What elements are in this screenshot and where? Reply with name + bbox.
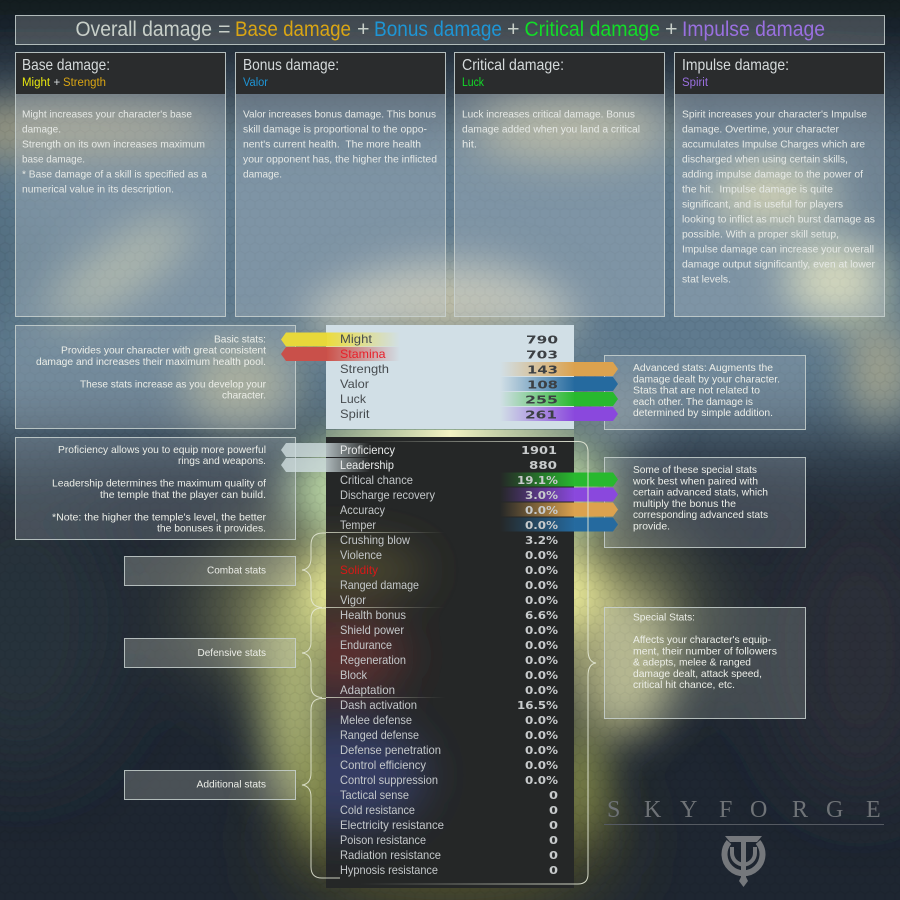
stats table: secondary: Radiation resistance [340, 848, 441, 862]
title bar: + [357, 17, 370, 41]
stats table: secondary: Discharge recovery [340, 488, 435, 502]
stats table: secondary: 0 [549, 835, 558, 847]
panel: critical damage [454, 52, 664, 316]
stats table: secondary: 0.0% [525, 730, 559, 742]
callout: paired special stats: provide. [633, 521, 670, 532]
callout: basic stats: Provides your character with great consistent [61, 346, 266, 357]
panel: impulse damage: damage output significantly, even at lower [682, 258, 875, 270]
label: combat stats: Combat stats [207, 566, 266, 576]
callout: special stats [604, 608, 806, 718]
stats table: primary: Valor [340, 377, 369, 391]
callout: paired special stats: corresponding advanced stats [633, 510, 768, 521]
panel: bonus damage: skill damage is proportional to the oppo- [243, 124, 427, 136]
stats table: secondary: Melee defense [340, 713, 412, 727]
title bar: Overall damage [76, 17, 212, 41]
title bar: Critical damage [524, 17, 660, 41]
stats table: secondary: Crushing blow [340, 533, 410, 547]
panel: base damage: Strength on its own increases maximum [22, 138, 205, 150]
stats table: secondary: 0.0% [525, 625, 559, 637]
stats table: secondary: 0.0% [525, 670, 559, 682]
panel: base damage: + [54, 77, 60, 89]
panel: bonus damage: your opponent has, the higher the inflicted [243, 154, 437, 166]
panel: impulse damage: the hit. Impulse damage is quite [682, 184, 833, 196]
callout: special stats: damage dealt, attack speed, [633, 669, 762, 680]
brace: defensive stats [302, 608, 326, 698]
callout: proficiency and leadership: Leadership determines the maximum quality of [52, 479, 266, 490]
panel: primary stats table background [326, 325, 574, 429]
stats table: secondary: 0.0% [525, 550, 559, 562]
stats table: secondary: Health bonus [340, 608, 406, 622]
stats table: secondary: Violence [340, 548, 382, 562]
stats table: secondary: Defense penetration [340, 743, 441, 757]
callout: advanced stats: Advanced stats: Augments the [633, 363, 773, 374]
stats table: secondary: 0.0% [525, 520, 559, 532]
stats table: primary: 790 [526, 334, 558, 346]
glow strip between tables [326, 430, 574, 437]
brace: additional stats [302, 698, 340, 878]
divider lines [326, 532, 445, 698]
arrows: basic stats [281, 332, 400, 361]
panel: bonus damage: Bonus damage: [243, 57, 339, 74]
stats table: secondary: 0.0% [525, 655, 559, 667]
panel: impulse damage [674, 52, 884, 316]
stats table: primary: 143 [527, 364, 558, 376]
stats table: primary [340, 332, 558, 422]
logo: Skyforge wordmark: SKYFORGE [607, 797, 881, 823]
stats table: secondary: Accuracy [340, 503, 385, 517]
callout: proficiency and leadership: Proficiency allows you to equip more powerful [58, 445, 266, 456]
stats table: secondary: 19.1% [517, 475, 559, 487]
panel: critical damage: Luck [462, 77, 484, 89]
stats table: secondary: 0.0% [525, 580, 559, 592]
panel: base damage: * Base damage of a skill is specified as a [22, 168, 207, 180]
stats table: secondary: Leadership [340, 458, 394, 472]
label: additional stats: Additional stats [196, 780, 266, 790]
stats table: primary: Spirit [340, 407, 370, 421]
panel: base damage: Might [22, 77, 51, 89]
stats table: secondary: 0.0% [525, 595, 559, 607]
panel: base damage: Strength [63, 77, 106, 89]
panel: secondary stats table background [326, 437, 574, 888]
stats table: secondary: Regeneration [340, 653, 406, 667]
stats table: secondary: Control efficiency [340, 758, 426, 772]
stats table: secondary: Ranged defense [340, 728, 419, 742]
callout: advanced stats: determined by simple addition. [633, 408, 773, 419]
panel: base damage: damage. [22, 124, 61, 136]
panel: bonus damage: damage. [243, 168, 282, 180]
stats table: secondary: 0.0% [525, 640, 559, 652]
stats table: secondary: Cold resistance [340, 803, 415, 817]
stats table: secondary [340, 443, 559, 877]
panel: impulse damage: possible. With a proper skill setup, [682, 228, 839, 240]
brace: combat stats [302, 533, 326, 608]
panel: bonus damage: Valor [243, 77, 268, 89]
stats table: secondary: Proficiency [340, 443, 395, 457]
stats table: primary: 108 [527, 380, 558, 392]
stats table: secondary: 880 [529, 460, 557, 472]
stats table: secondary: 3.0% [525, 490, 559, 502]
stats table: secondary: 16.5% [517, 700, 559, 712]
callout: proficiency and leadership: rings and weapons. [178, 456, 266, 467]
label: defensive stats: Defensive stats [198, 648, 266, 659]
stats table: secondary: Block [340, 668, 368, 682]
stats table: secondary: Endurance [340, 638, 392, 652]
callout: special stats: & adepts, melee & ranged [633, 658, 751, 668]
panel: base damage [16, 52, 226, 316]
stats table: secondary: 0.0% [525, 505, 559, 517]
stats table: secondary: 0 [549, 805, 558, 817]
arrows: proficiency and leadership [281, 443, 372, 472]
stats table: primary: Strength [340, 362, 389, 376]
callout: advanced stats [604, 356, 806, 430]
stats table: primary: Stamina [340, 347, 386, 361]
callout: special stats: ment, their number of followers [633, 646, 777, 657]
panel: bonus damage: nent's current health. The more health [243, 138, 421, 150]
panel: base damage: base damage. [22, 154, 85, 166]
callout: special stats: Special Stats: [633, 612, 695, 624]
callout: paired special stats: Some of these special stats [633, 465, 757, 476]
panel: base damage: Base damage: [22, 57, 110, 74]
stats table: secondary: 0.0% [525, 745, 559, 757]
stats table: secondary: Ranged damage [340, 578, 419, 592]
callout: proficiency and leadership: *Note: the higher the temple's level, the better [52, 512, 267, 524]
callout: basic stats: damage and increases their maximum health pool. [36, 357, 266, 368]
callout: advanced stats: each other. The damage is [633, 397, 753, 408]
label: defensive stats [124, 638, 296, 668]
label: additional stats [124, 770, 296, 800]
stats table: secondary: 3.2% [525, 535, 559, 547]
title bar: Impulse damage [682, 17, 825, 41]
stats table: secondary: Temper [340, 518, 376, 532]
callout: advanced stats: damage dealt by your character. [633, 374, 780, 385]
arrows: paired special stats [500, 472, 618, 532]
callout: special stats: critical hit chance, etc. [633, 680, 735, 691]
panel: impulse damage: significant, and is useful for players [682, 198, 843, 210]
stats table: secondary: 0.0% [525, 565, 559, 577]
panel: base damage: numerical value in its description. [22, 184, 174, 196]
stats table: secondary: 1901 [521, 445, 557, 457]
stats table: primary: Luck [340, 392, 367, 406]
stats table: primary: Might [340, 332, 373, 346]
arrows: advanced stats [500, 362, 618, 421]
stats table: secondary: Critical chance [340, 473, 413, 487]
callout: paired special stats: work best when paired with [632, 476, 758, 487]
panel: impulse damage: Spirit [682, 77, 709, 89]
stats table: primary: 703 [526, 350, 558, 362]
title bar: Bonus damage [374, 17, 502, 41]
callout: paired special stats: certain advanced stats, which [633, 488, 768, 498]
panel: critical damage: Luck increases critical damage. Bonus [462, 108, 635, 120]
panel: impulse damage: Impulse damage can increase your overall [682, 244, 874, 256]
callout: basic stats [16, 326, 296, 428]
callout: special stats: Affects your character's equip- [633, 635, 771, 646]
stats table: secondary: Tactical sense [340, 788, 409, 802]
title bar: Base damage [235, 17, 351, 41]
panel: impulse damage: accumulates Impulse Charges which are [682, 138, 865, 150]
stats table: secondary: 0.0% [525, 775, 559, 787]
brace: special stats [360, 442, 596, 884]
stats table: secondary: Adaptation [340, 683, 395, 697]
callout: advanced stats: Stats that are not related to [633, 386, 760, 396]
stats table: secondary: Shield power [340, 623, 404, 637]
panel: impulse damage: Spirit increases your character's Impulse [682, 108, 867, 120]
stats table: secondary: Vigor [340, 593, 366, 607]
stats table: secondary: Dash activation [340, 698, 417, 712]
panel: critical damage: Critical damage: [462, 57, 564, 74]
stats table: secondary: 0.0% [525, 685, 559, 697]
stats table: secondary: Poison resistance [340, 833, 426, 847]
stats table: secondary: Electricity resistance [340, 818, 444, 832]
stats table: secondary: Control suppression [340, 773, 438, 787]
stats table: secondary: 0 [549, 790, 558, 802]
panel: bonus damage: Valor increases bonus damage. This bonus [243, 108, 436, 120]
panel: base damage: Might increases your character's base [22, 108, 192, 120]
stats table: secondary: 0.0% [525, 760, 559, 772]
panel: impulse damage: Impulse damage: [682, 57, 789, 74]
title bar: + [507, 17, 520, 41]
stats table: secondary: 0 [549, 865, 558, 877]
stats table: primary: 261 [525, 410, 557, 422]
stats table: secondary: Solidity [340, 563, 378, 577]
callout: basic stats: These stats increase as you develop your [80, 380, 267, 390]
stats table: secondary: 0 [549, 820, 558, 832]
stats table: secondary: 0 [549, 850, 558, 862]
callout: basic stats: Basic stats: [214, 334, 266, 346]
panel: impulse damage: adding impulse damage to the power of [682, 168, 863, 180]
panel: impulse damage: stat levels. [682, 274, 731, 286]
title bar [16, 16, 884, 44]
panel: critical damage: damage added when you land a critical [462, 124, 640, 136]
callout: proficiency and leadership: the temple that the player can build. [100, 490, 266, 501]
title bar: + [665, 17, 678, 41]
stats table: secondary: 6.6% [525, 610, 559, 622]
panel: critical damage: hit. [462, 138, 477, 150]
label: combat stats [124, 556, 296, 586]
callout: proficiency and leadership: the bonuses it provides. [157, 524, 266, 535]
callout: proficiency and leadership [16, 438, 296, 540]
stats table: secondary: Hypnosis resistance [340, 863, 438, 877]
icon: Skyforge emblem [724, 836, 762, 887]
panel: bonus damage [236, 52, 446, 316]
stats table: primary: 255 [525, 394, 558, 406]
title bar: = [218, 17, 231, 41]
callout: basic stats: character. [222, 391, 266, 402]
panel: impulse damage: looking to inflict as much burst damage as [682, 214, 875, 226]
callout: paired special stats: multiply the bonus the [633, 499, 736, 510]
panel: impulse damage: discharged when using certain skills, [682, 154, 848, 166]
panel: impulse damage: damage. Overtime, your character [682, 124, 839, 136]
stats table: secondary: 0.0% [525, 715, 559, 727]
callout: paired special stats [604, 458, 806, 548]
